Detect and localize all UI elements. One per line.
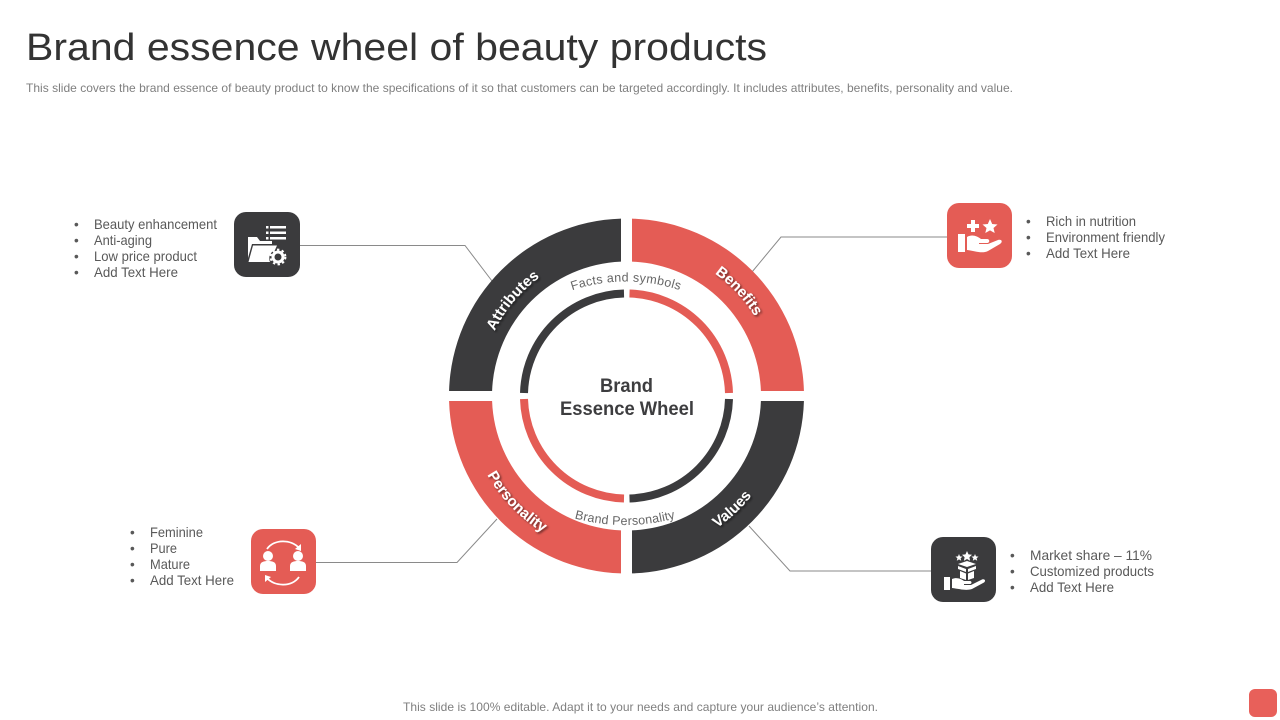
segment: personality [449,401,621,574]
list: personality: • [130,541,135,556]
icon: hand holding box with stars [931,537,996,602]
list: benefits: Add Text Here [1046,246,1130,261]
segment: benefits [632,218,804,391]
footer note: This slide is 100% editable. Adapt it to your needs and capture your audience’s attention. [403,700,878,714]
connector: benefits [752,237,947,272]
list: personality [130,525,234,588]
list: attributes: • [74,233,79,248]
center label: Essence Wheel [560,399,694,420]
list: personality: Mature [150,557,190,572]
list: benefits: • [1026,214,1031,229]
list: attributes: • [74,265,79,280]
list: benefits: Environment friendly [1046,230,1165,245]
subtitle: This slide covers the brand essence of beauty product to know the specifications of it so that customers can be targeted accordingly. It includes attributes, benefits, personality and value. [26,81,1013,95]
segment: attributes: Attributes [487,272,540,332]
brand essence wheel [449,218,804,574]
list: benefits [1026,214,1165,261]
list: values: Add Text Here [1030,580,1114,595]
icon: hand with stars [947,203,1012,268]
curved label: facts and symbols: Facts and symbols [570,272,681,290]
list: personality: Feminine [150,525,203,540]
segment: values: Values [711,492,752,528]
icon: folder with list and gear [234,212,300,277]
list: values: Market share – 11% [1030,548,1152,563]
center label [560,376,694,420]
connector: attributes [300,246,492,281]
list: benefits: • [1026,246,1031,261]
list: attributes: • [74,249,79,264]
list: values: • [1010,564,1015,579]
list: attributes: Anti-aging [94,233,152,248]
segment: attributes [449,218,621,391]
list: attributes: Low price product [94,249,197,264]
list: attributes: Beauty enhancement [94,217,217,232]
list: personality: Add Text Here [150,573,234,588]
list: personality: • [130,525,135,540]
connector: personality [316,519,497,562]
curved label: brand personality: Brand Personality [575,510,674,526]
list: values [1010,548,1154,595]
list: benefits: Rich in nutrition [1046,214,1136,229]
list: personality: Pure [150,541,177,556]
list: attributes: Add Text Here [94,265,178,280]
list: values: • [1010,548,1015,563]
icon: people exchange [251,529,316,594]
list: values: Customized products [1030,564,1154,579]
list: benefits: • [1026,230,1031,245]
title: Brand essence wheel of beauty products [26,27,767,69]
center label: Brand [600,376,653,397]
segment: values [632,401,804,574]
list: attributes: • [74,217,79,232]
list: personality: • [130,557,135,572]
list: personality: • [130,573,135,588]
connector: values [749,526,931,571]
segment: benefits: Benefits [716,266,763,318]
segment: personality: Personality [488,470,550,535]
inner ring [524,294,729,498]
list: attributes [74,217,217,280]
list: values: • [1010,580,1015,595]
corner button [1249,689,1277,717]
